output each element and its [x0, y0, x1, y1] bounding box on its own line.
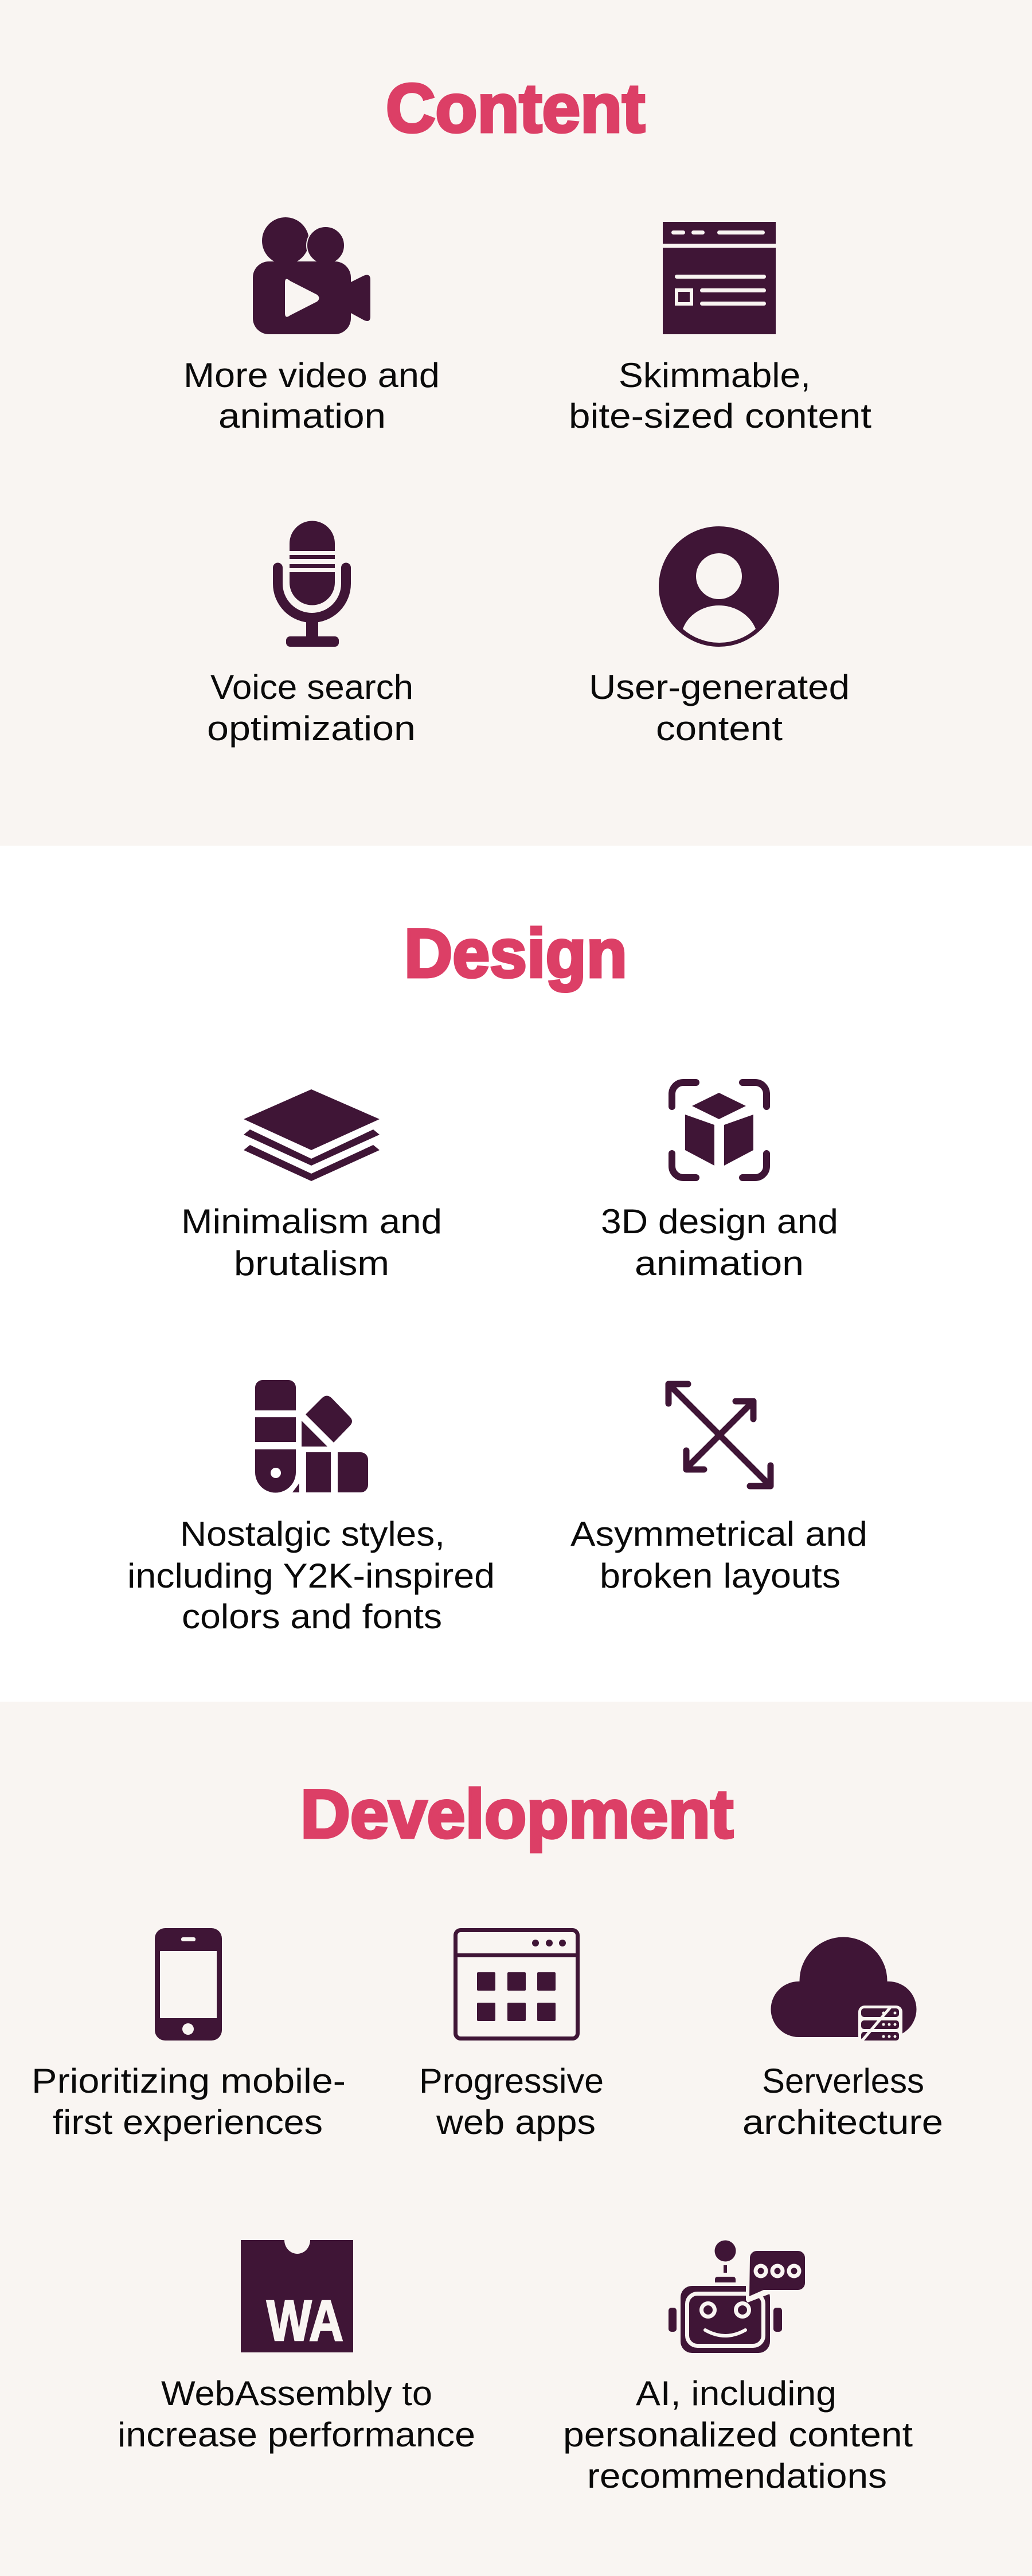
heading: design: Design: [404, 915, 627, 992]
icon: color swatches: [255, 1380, 368, 1493]
label: nostalgic styles: [127, 1515, 495, 1636]
label: nostalgic styles: including Y2K-inspired: [127, 1557, 495, 1595]
label: prioritizing mobile-first experiences: Prioritizing mobile-: [32, 2062, 346, 2100]
label: more video and animation: [183, 356, 440, 435]
label: serverless architecture: [742, 2062, 943, 2141]
label: webassembly to increase performance: WebAssembly to: [161, 2374, 432, 2413]
label: voice search optimization: [207, 668, 416, 748]
label: asymmetrical and broken layouts: [570, 1515, 867, 1595]
panel: development: [0, 1702, 1032, 2576]
label: prioritizing mobile-first experiences: [32, 2062, 346, 2141]
label: minimalism and brutalism: brutalism: [234, 1244, 389, 1283]
icon: progressive web app window: [454, 1930, 579, 2039]
panel: content: [0, 0, 1032, 846]
label: AI personalized recommendations: [563, 2374, 913, 2495]
icon: 3D cube: [672, 1082, 767, 1178]
label: progressive web apps: Progressive: [419, 2062, 604, 2100]
label: asymmetrical and broken layouts: Asymmetrical and: [570, 1515, 867, 1553]
label: 3D design and animation: animation: [635, 1244, 804, 1283]
label: nostalgic styles: colors and fonts: [182, 1597, 442, 1636]
icon: browser window with text: [663, 222, 776, 334]
icon: crossed arrows: [669, 1384, 771, 1486]
label: user-generated content: User-generated: [589, 668, 850, 706]
label: prioritizing mobile-first experiences: first experiences: [53, 2103, 323, 2141]
label: voice search optimization: optimization: [207, 709, 416, 748]
panel: design: [0, 846, 1032, 1702]
label: minimalism and brutalism: [181, 1202, 442, 1283]
label: progressive web apps: web apps: [436, 2103, 596, 2141]
icon: serverless cloud: [771, 1937, 916, 2043]
label: skimmable content: bite-sized content: [569, 397, 871, 435]
label: AI personalized recommendations: recommendations: [587, 2457, 887, 2495]
label: more video and animation: animation: [218, 397, 386, 435]
icon: stacked layers: [244, 1089, 380, 1181]
label: more video and animation: More video and: [183, 356, 440, 394]
icon: video camera: [253, 217, 370, 334]
label: 3D design and animation: [601, 1202, 838, 1283]
icon: WebAssembly logo: WA: [267, 2289, 343, 2353]
label: 3D design and animation: 3D design and: [601, 1202, 838, 1241]
label: minimalism and brutalism: Minimalism and: [181, 1202, 442, 1241]
label: AI personalized recommendations: personalized content: [563, 2415, 913, 2454]
label: asymmetrical and broken layouts: broken layouts: [600, 1557, 841, 1595]
icon: WebAssembly logo: [241, 2240, 353, 2353]
icon: smartphone: [155, 1928, 222, 2041]
label: webassembly to increase performance: increase performance: [118, 2415, 475, 2454]
label: progressive web apps: [419, 2062, 604, 2141]
icon: user avatar: [659, 526, 779, 647]
label: user-generated content: [589, 668, 850, 748]
label: voice search optimization: Voice search: [210, 668, 413, 706]
heading: content: Content: [386, 70, 645, 147]
label: skimmable content: Skimmable,: [619, 356, 811, 394]
icon: microphone: [277, 521, 346, 647]
icon: AI robot: [669, 2241, 805, 2353]
heading: development: Development: [300, 1776, 733, 1852]
label: serverless architecture: Serverless: [762, 2062, 924, 2100]
label: skimmable content: [569, 356, 871, 435]
label: user-generated content: content: [656, 709, 783, 748]
label: serverless architecture: architecture: [742, 2103, 943, 2141]
label: nostalgic styles: Nostalgic styles,: [180, 1515, 445, 1553]
label: webassembly to increase performance: [118, 2374, 475, 2454]
label: AI personalized recommendations: AI, including: [636, 2374, 836, 2413]
